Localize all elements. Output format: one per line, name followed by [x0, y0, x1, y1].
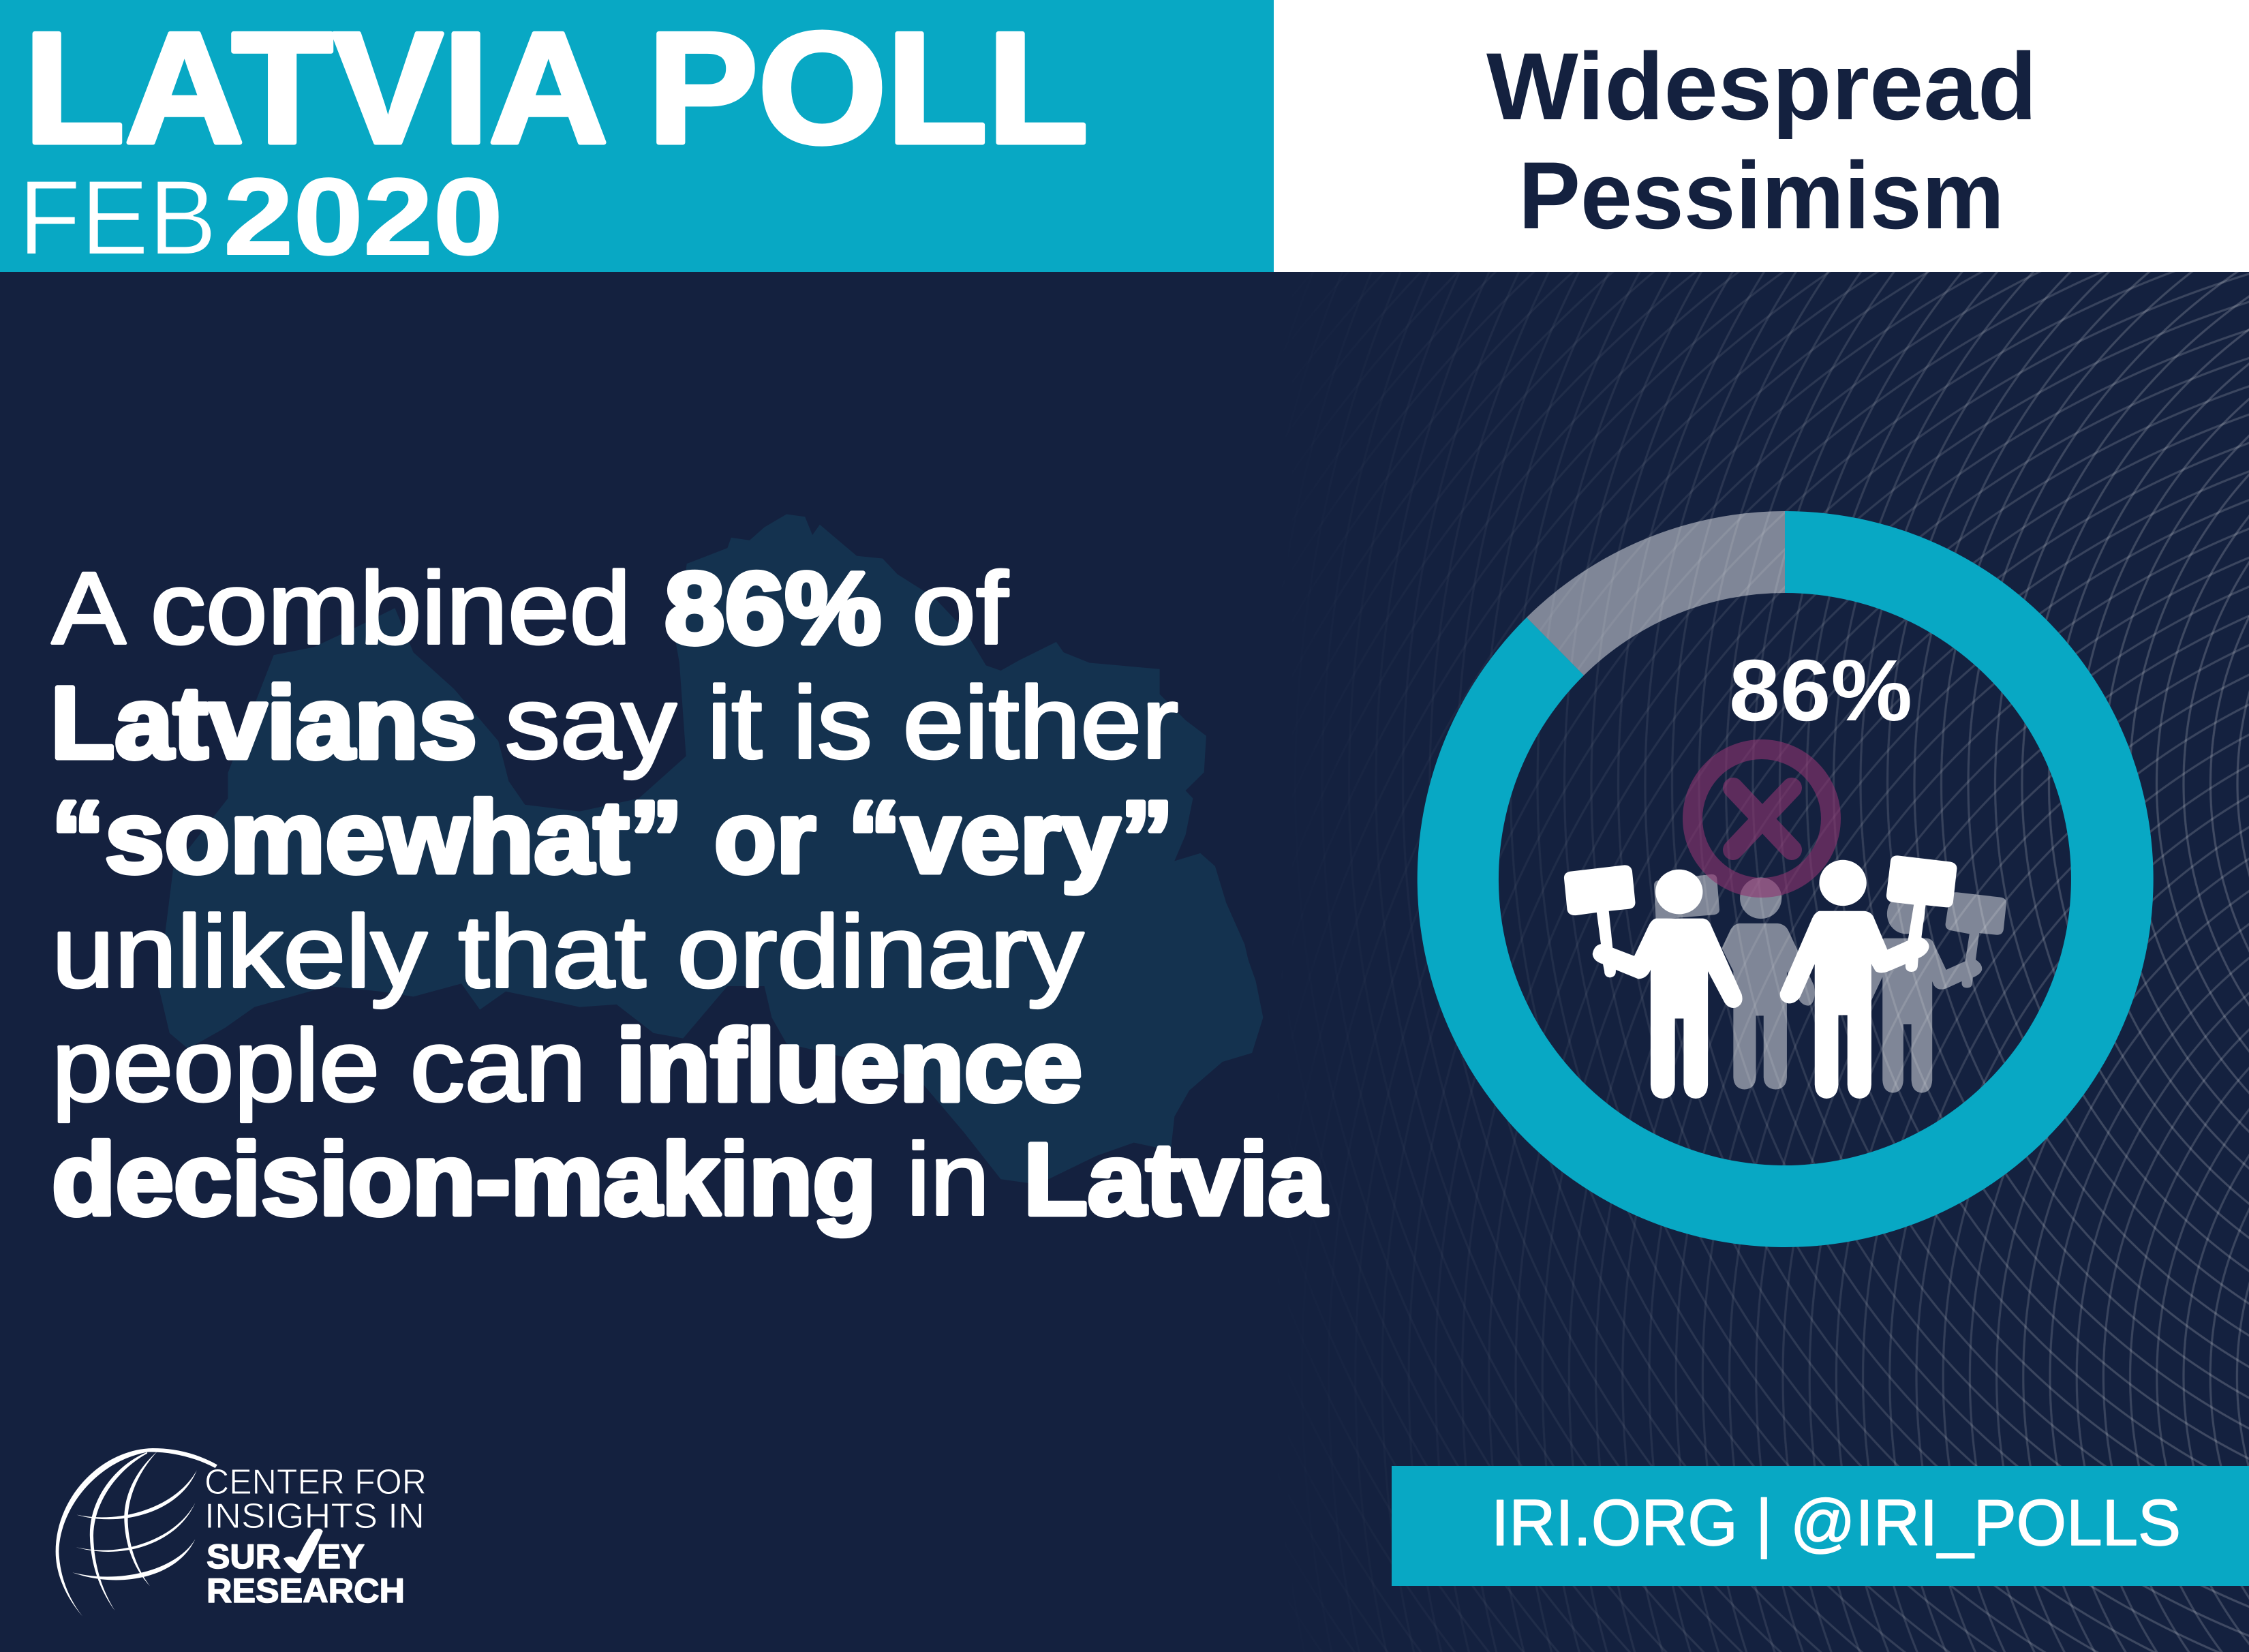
- main statement text: decision-making: [52, 1122, 876, 1236]
- logo text: [204, 1463, 427, 1610]
- background mesh pattern: [1371, 272, 2249, 1652]
- topic heading: Widespread: [1486, 33, 2037, 140]
- main statement text: say it is either: [505, 665, 1178, 780]
- subtitle: FEB 2020: [18, 155, 503, 277]
- subtitle: FEB 2020: 2020: [224, 155, 503, 277]
- main statement text: or: [714, 780, 816, 894]
- header panel: topic: [1274, 0, 2249, 272]
- donut segment: 86% unlikely: [1418, 511, 2154, 1247]
- logo text: EY: [317, 1538, 365, 1576]
- topic heading: Pessimism: [1518, 142, 2004, 249]
- main statement text: people can: [52, 1008, 586, 1122]
- main statement text: Latvia: [1024, 1122, 1328, 1236]
- map of Latvia silhouette: [159, 514, 1263, 1184]
- main statement text: 86%: [664, 551, 881, 665]
- icon: back protesters: [1654, 874, 2006, 1093]
- main statement text: influence: [616, 1008, 1082, 1122]
- logo text: RESEARCH: [206, 1572, 405, 1610]
- logo: Center for Insights in Survey Research: [56, 1448, 427, 1617]
- main statement text: in: [906, 1122, 990, 1236]
- main statement text: “very”: [848, 780, 1174, 894]
- donut segment: remainder: [1527, 511, 1785, 675]
- subtitle: FEB 2020: FEB: [18, 159, 217, 277]
- icon: front protesters: [1564, 855, 1957, 1099]
- logo text: INSIGHTS IN: [204, 1497, 425, 1536]
- main statement text: Latvians: [50, 665, 477, 780]
- donut chart: 86%: [1418, 511, 2154, 1247]
- logo text: SUR: [206, 1538, 281, 1576]
- donut value label: 86%: [1729, 642, 1912, 739]
- footer link text: IRI.ORG | @IRI_POLLS: [1491, 1486, 2181, 1559]
- icon: protesters with signs and X: [1564, 750, 2006, 1099]
- icon: X in circle: [1693, 750, 1831, 887]
- main statement text: of: [912, 551, 1008, 665]
- footer banner: links: [1392, 1466, 2249, 1586]
- main statement text: “somewhat”: [51, 780, 683, 894]
- topic heading: [1486, 33, 2037, 249]
- main statement text: [50, 551, 1328, 1236]
- main statement text: unlikely that ordinary: [52, 894, 1084, 1009]
- icon: globe and checkmark: [56, 1448, 323, 1617]
- title: LATVIA POLL: LATVIA POLL: [24, 0, 1088, 177]
- main statement text: A combined: [52, 551, 631, 665]
- header panel: title: [0, 0, 1274, 277]
- logo text: CENTER FOR: [204, 1463, 427, 1502]
